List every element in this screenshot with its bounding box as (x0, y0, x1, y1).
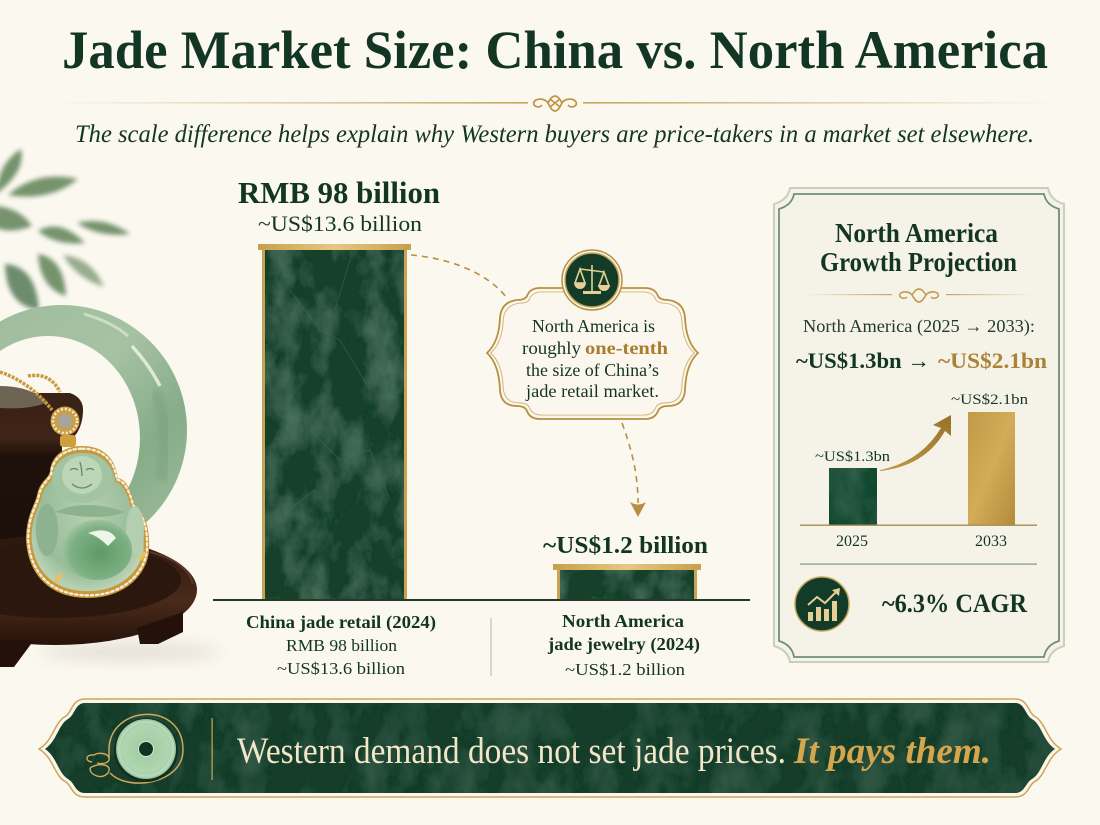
stand shadow (40, 644, 220, 660)
value label: China: ~US$13.6 billion (258, 211, 422, 236)
category label: China: China jade retail (2024) (246, 612, 436, 633)
projection label: North America (2025 → 2033): (803, 316, 1035, 337)
title divider ornament (50, 96, 1058, 111)
chain (0, 372, 60, 410)
category label: North America: jade jewelry (2024) (547, 634, 700, 655)
tray (0, 535, 197, 645)
dashed arrow from callout to North America bar (622, 423, 646, 517)
subtitle: The scale difference helps explain why Western buyers are price-takers in a market set elsewhere. (75, 119, 1034, 148)
label: 2033 value: ~US$2.1bn (951, 392, 1029, 408)
category label: China: ~US$13.6 billion (277, 659, 406, 678)
value label: China (238, 175, 440, 236)
icon: growth chart (795, 577, 849, 631)
callout: one-tenth comparison (487, 250, 698, 419)
callout text: the size of China’s (526, 360, 659, 380)
category label: China (246, 612, 436, 678)
callout text: roughly (522, 338, 581, 358)
label: 2025 value: ~US$1.3bn (815, 449, 891, 465)
arrow: growth (880, 415, 951, 471)
pendant (26, 446, 149, 598)
bail (50, 406, 80, 436)
value label: North America: ~US$1.2 billion (543, 533, 708, 559)
bar: 2025 (829, 468, 877, 525)
bar chart: market size comparison (213, 175, 750, 679)
panel heading (820, 218, 1017, 277)
icon: jade disc with cloud scroll (87, 714, 183, 783)
label: 2025: 2025 (836, 533, 868, 550)
icon: balance scale (562, 250, 622, 310)
category label: North America: ~US$1.2 billion (565, 660, 686, 679)
bangle (0, 305, 187, 555)
dashed connector from China bar to callout (411, 255, 507, 298)
panel: North America growth projection (774, 188, 1064, 662)
bar: China (258, 244, 411, 600)
callout text: one-tenth (585, 338, 668, 358)
banner: key takeaway (39, 699, 1061, 797)
mini bar chart (800, 392, 1037, 550)
bar: 2033 (968, 412, 1015, 525)
value label: China: RMB 98 billion (238, 175, 440, 210)
label: 2033: 2033 (975, 533, 1007, 550)
callout text: jade retail market. (525, 381, 659, 401)
panel heading: North America (835, 218, 998, 248)
title: Jade Market Size: China vs. North America (62, 20, 1048, 80)
panel divider ornament (803, 289, 1032, 302)
callout text (522, 316, 668, 401)
callout text: North America is (532, 316, 655, 336)
category label: China: RMB 98 billion (286, 636, 398, 655)
banner text: It pays them. (793, 731, 991, 772)
projection values (796, 348, 1047, 373)
projection values: ~US$2.1bn (938, 348, 1047, 373)
projection values: ~US$1.3bn → (796, 348, 930, 373)
photo: jade bangle and Buddha pendant on wooden stand (0, 149, 220, 667)
bar: North America (553, 564, 701, 600)
category label: North America (547, 611, 700, 679)
axis (213, 599, 750, 601)
upper wooden stand (0, 393, 83, 575)
panel heading: Growth Projection (820, 247, 1017, 277)
CAGR value: ~6.3% CAGR (882, 589, 1027, 618)
banner text: Western demand does not set jade prices. (237, 731, 786, 772)
category label: North America: North America (562, 611, 684, 631)
